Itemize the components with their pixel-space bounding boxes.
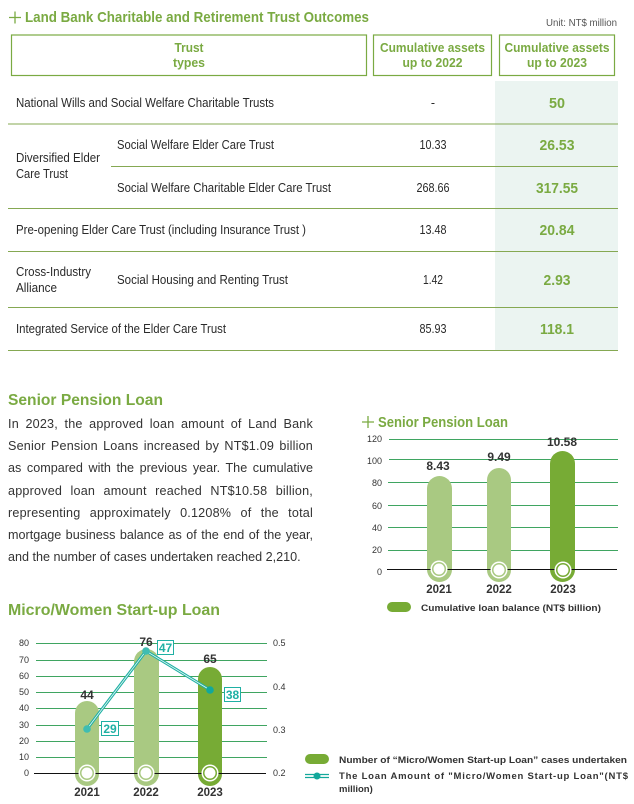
table header: trust types (12, 35, 366, 76)
data label 38: 38 (226, 688, 239, 702)
chart: micro/women start-up loan (19, 635, 286, 799)
y axis labels: 0 (377, 567, 382, 577)
bar base rings (430, 560, 572, 578)
row: diversified elder care: 268.66 (416, 181, 450, 195)
right axis labels: 0.2 (273, 768, 286, 778)
bar 2021 (74, 688, 100, 799)
row: pre-opening: 20.84 (540, 223, 574, 239)
left axis labels: 70 (19, 655, 29, 665)
bar 2023: 65 (203, 652, 217, 666)
paragraph: senior pension loan: In 2023, the approved loan amount of Land Bank (8, 417, 313, 431)
legend item: cases: Number of “Micro/Women Start-up Loan” cases undertaken (339, 755, 627, 766)
left axis labels: 30 (19, 720, 29, 730)
row: diversified elder care: Social Welfare Charitable Elder Care Trust (117, 181, 331, 195)
chart: senior pension loan (362, 415, 618, 614)
y axis labels: 100 (367, 456, 382, 466)
right axis labels: 0.4 (273, 682, 286, 692)
row: pre-opening: 13.48 (420, 223, 447, 237)
bar 2023 (197, 652, 223, 799)
paragraph: senior pension loan: as compared with the previous year. The cumulative (8, 461, 313, 475)
bar 2023: 10.58 (547, 435, 577, 449)
row: integrated service: 85.93 (420, 322, 447, 336)
right axis labels (273, 638, 286, 778)
paragraph: senior pension loan (8, 417, 313, 564)
y axis labels: 80 (372, 478, 382, 488)
left axis labels: 20 (19, 736, 29, 746)
legend item: loan amount: million) (339, 784, 373, 795)
table highlight column (495, 81, 618, 350)
data label 29: 29 (103, 722, 117, 736)
row: national wills: - (431, 96, 435, 110)
table header: assets 2023: up to 2023 (527, 55, 587, 70)
table: trust outcomes (8, 35, 618, 350)
row: cross-industry: 1.42 (423, 273, 443, 287)
row: cross-industry: Social Housing and Renting Trust (117, 273, 288, 287)
row: national wills: 50 (549, 96, 565, 112)
table header: assets 2022: Cumulative assets (380, 40, 485, 55)
bar 2023 (547, 435, 577, 596)
chart heading: Senior Pension Loan (378, 415, 508, 431)
row: diversified elder care (16, 138, 578, 197)
left axis labels: 40 (19, 703, 29, 713)
row: integrated service: Integrated Service of the Elder Care Trust (16, 322, 226, 336)
row: diversified elder care: Social Welfare Elder Care Trust (117, 138, 274, 152)
bar 2023: 2023 (550, 584, 576, 596)
left axis labels: 60 (19, 671, 29, 681)
chart legend: Cumulative loan balance (NT$ billion) (421, 603, 601, 614)
row: cross-industry: Cross-Industry (16, 265, 92, 279)
y axis labels (367, 434, 382, 577)
paragraph: senior pension loan: mortgage business balance as of the end of the year, (8, 528, 313, 542)
row: national wills: National Wills and Social Welfare Charitable Trusts (16, 96, 274, 110)
left axis labels: 10 (19, 752, 29, 762)
bar 2022 (133, 635, 159, 799)
paragraph: senior pension loan: and the number of cases undertaken reached 2,210. (8, 550, 301, 564)
row: pre-opening (16, 223, 574, 239)
bar 2022: 2022 (133, 787, 159, 799)
row: diversified elder care: 317.55 (536, 181, 578, 197)
data label 47: 47 (159, 641, 172, 655)
unit note: Unit: NT$ million (546, 18, 617, 29)
row: diversified elder care: Diversified Elder (16, 151, 100, 165)
y axis labels: 20 (372, 545, 382, 555)
bar 2021: 2021 (74, 787, 100, 799)
left axis labels: 0 (24, 768, 29, 778)
right axis labels: 0.5 (273, 638, 286, 648)
paragraph: senior pension loan: representing approximately 0.1208% of the total (8, 506, 313, 520)
row: diversified elder care: 26.53 (540, 138, 574, 154)
y axis labels: 40 (372, 523, 382, 533)
left axis labels: 80 (19, 638, 29, 648)
chart legend: micro/women (305, 754, 629, 795)
bar 2022: 76 (139, 635, 153, 649)
table header: assets 2022 (374, 35, 492, 76)
row: integrated service: 118.1 (540, 322, 574, 338)
y axis labels: 120 (367, 434, 382, 444)
bar 2021 (426, 459, 452, 596)
right axis labels: 0.3 (273, 725, 286, 735)
row: cross-industry: Alliance (16, 281, 57, 295)
bar 2021: 2021 (426, 584, 452, 596)
legend item: loan amount: The Loan Amount of "Micro/Women Start-up Loan"(NT$ (339, 771, 629, 782)
heading: micro/women start-up loan: Micro/Women Start-up Loan (8, 602, 220, 619)
row: integrated service (16, 322, 574, 338)
paragraph: senior pension loan: Senior Pension Loans increased by NT$1.09 billion (8, 439, 313, 453)
bar base rings (78, 764, 218, 782)
line series: loan amount (83, 647, 214, 733)
row: diversified elder care: 10.33 (420, 138, 447, 152)
bar 2022: 9.49 (487, 450, 511, 464)
paragraph: senior pension loan: approved loan amount reached NT$10.58 billion, (8, 484, 313, 498)
table header: assets 2023: Cumulative assets (504, 40, 610, 55)
table header: assets 2022: up to 2022 (402, 55, 462, 70)
heading: senior pension loan: Senior Pension Loan (8, 392, 163, 409)
table header: assets 2023 (500, 35, 614, 76)
row: pre-opening: Pre-opening Elder Care Trust (including Insurance Trust ) (16, 223, 306, 237)
row: cross-industry: 2.93 (544, 273, 570, 289)
bar 2023: 2023 (197, 787, 223, 799)
left axis labels: 50 (19, 687, 29, 697)
legend item: loan amount (305, 771, 629, 795)
row: cross-industry (16, 265, 570, 295)
row: national wills (16, 96, 565, 112)
table header: trust types: types (173, 55, 205, 70)
bar 2022: 2022 (486, 584, 512, 596)
heading: trust outcomes: Land Bank Charitable and Retirement Trust Outcomes (25, 9, 369, 26)
bar 2021: 8.43 (426, 459, 450, 473)
table header: trust types: Trust (174, 40, 204, 55)
left axis labels (19, 638, 29, 778)
bar 2022 (486, 450, 512, 596)
bar 2021: 44 (80, 688, 94, 702)
y axis labels: 60 (372, 501, 382, 511)
row: diversified elder care: Care Trust (16, 167, 68, 181)
